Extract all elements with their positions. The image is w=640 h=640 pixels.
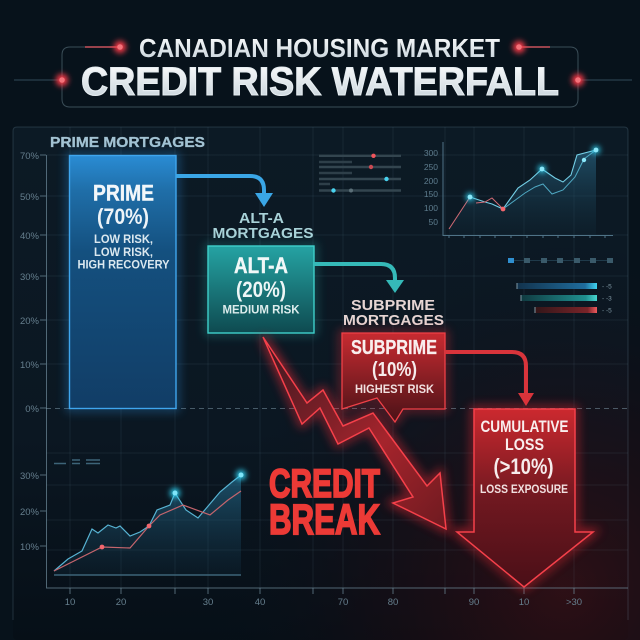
y axis labels: 30% (20, 272, 40, 283)
x axis labels: 20 (116, 597, 126, 608)
panel: cumulative loss arrow: (>10%) (494, 454, 554, 479)
arrow: credit break zigzag (263, 337, 446, 529)
chart: bottom left line chart (54, 460, 246, 575)
chart: top right line chart: 200 (424, 176, 438, 186)
panel: cumulative loss arrow: LOSS EXPOSURE (480, 482, 568, 496)
panel: alt-a box: MEDIUM RISK (222, 302, 300, 316)
arrow: alt-a to subprime (314, 264, 404, 293)
heading: alt-a mortgages: MORTGAGES (212, 225, 314, 242)
heading: subprime mortgages (343, 297, 444, 329)
x axis labels: 80 (388, 597, 398, 608)
heading: prime mortgages: PRIME MORTGAGES (50, 134, 205, 151)
y axis labels: 30% (20, 471, 40, 482)
x axis labels: 70 (338, 597, 348, 608)
panel: prime bar: HIGH RECOVERY (78, 258, 170, 272)
chart: top right line chart: 150 (424, 189, 438, 199)
grid lines (13, 127, 628, 620)
horizontal mini bars: - -3 (602, 296, 612, 302)
chart: top right line chart (424, 142, 613, 238)
horizontal mini bars (517, 283, 612, 314)
x axis labels: 30 (203, 597, 213, 608)
panel: cumulative loss arrow (457, 409, 593, 587)
heading: subprime mortgages: MORTGAGES (343, 312, 444, 329)
x axis labels (65, 597, 582, 608)
x axis labels: 40 (255, 597, 265, 608)
panel: prime bar: LOW RISK, (94, 232, 153, 246)
horizontal mini bars: - -5 (602, 308, 612, 314)
y axis labels: 70% (20, 151, 40, 162)
arrow: subprime to cumulative loss (445, 352, 534, 406)
chart: top right line chart: 100 (424, 203, 438, 213)
main axes (40, 155, 628, 594)
x axis labels: >30 (566, 597, 582, 608)
panel: subprime box: (10%) (372, 359, 417, 381)
panel: subprime box: HIGHEST RISK (355, 382, 434, 396)
x axis labels: 10 (65, 597, 75, 608)
chart: top right line chart: 250 (424, 162, 438, 172)
y axis labels (20, 151, 40, 553)
y axis labels: 40% (20, 231, 40, 242)
label: credit break: CREDIT (269, 462, 380, 506)
heading: subprime mortgages: SUBPRIME (351, 297, 435, 314)
heading: alt-a mortgages: ALT-A (239, 210, 284, 227)
panel: subprime box (342, 333, 445, 422)
heading: alt-a mortgages (212, 210, 314, 242)
chart: top right line chart: 50 (429, 217, 438, 227)
chart: top right line chart: 300 (424, 148, 438, 158)
panel: alt-a box (208, 246, 314, 333)
panel: cumulative loss arrow: CUMULATIVE (480, 417, 568, 436)
arrow: prime to alt-a (176, 176, 273, 207)
title banner (14, 33, 632, 107)
panel: prime bar: LOW RISK, (94, 245, 153, 259)
y axis labels: 0% (25, 404, 40, 415)
panel: prime bar: PRIME (93, 180, 154, 206)
label: credit break: BREAK (269, 496, 380, 544)
horizontal mini bars: - -5 (602, 284, 612, 290)
panel: subprime box: SUBPRIME (351, 337, 437, 359)
panel: alt-a box: ALT-A (234, 253, 288, 278)
y axis labels: 20% (20, 316, 40, 327)
title line 2: CREDIT RISK WATERFALL (81, 60, 559, 104)
y axis labels: 10% (20, 542, 40, 553)
x axis labels: 90 (469, 597, 479, 608)
x axis labels: 10 (519, 597, 529, 608)
slider list decoration (319, 154, 401, 193)
label: credit break (269, 462, 380, 544)
panel: cumulative loss arrow: LOSS (505, 435, 544, 454)
y axis labels: 20% (20, 507, 40, 518)
title frame (14, 41, 632, 107)
panel: alt-a box: (20%) (236, 277, 286, 302)
panel: prime bar (70, 156, 176, 408)
pagination squares (508, 258, 613, 263)
title line 1: CANADIAN HOUSING MARKET (139, 33, 500, 63)
y axis labels: 50% (20, 192, 40, 203)
panel: prime bar: (70%) (97, 204, 149, 229)
y axis labels: 10% (20, 360, 40, 371)
